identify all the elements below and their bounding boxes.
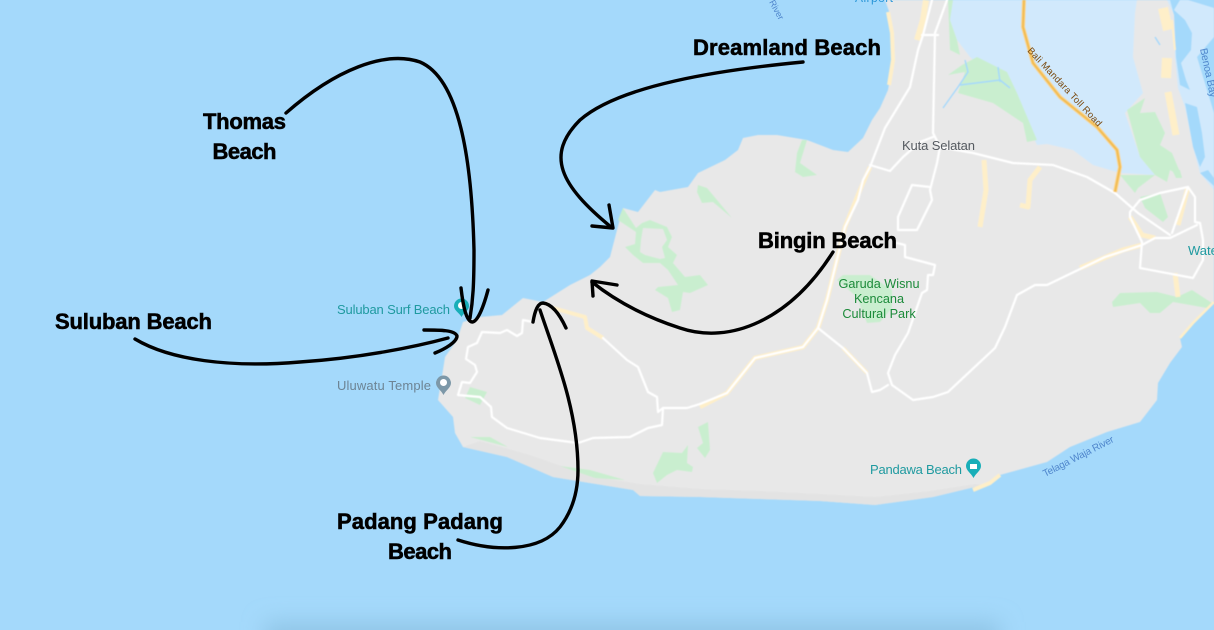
yellow arterial patches	[553, 0, 1214, 490]
bay water east	[1167, 0, 1214, 190]
icon: Suluban Surf Beach pin	[454, 299, 469, 317]
arrow: Bingin Beach	[592, 252, 833, 333]
arrow: Padang Padang Beach	[458, 303, 578, 548]
streams	[943, 37, 1160, 108]
icon: Pandawa Beach pin	[966, 458, 981, 478]
place name labels	[337, 0, 1214, 480]
green areas	[465, 0, 1212, 483]
place name labels: Cultural Park	[842, 307, 916, 321]
label: Padang Padang Beach: Beach	[388, 539, 452, 564]
arrow: Dreamland Beach	[561, 62, 803, 228]
label: Dreamland Beach: Dreamland Beach	[693, 35, 881, 60]
label: Thomas Beach: Beach	[212, 139, 276, 164]
arrow: Suluban Beach	[135, 330, 457, 364]
label: Padang Padang Beach: Padang Padang	[337, 509, 503, 534]
base map	[438, 0, 1214, 505]
place name labels: Suluban Surf Beach	[337, 302, 450, 317]
place name labels: Telaga Waja River	[1041, 434, 1116, 480]
south coast shading	[463, 441, 983, 505]
place name labels: Kuta Selatan	[902, 138, 975, 153]
land: peninsula	[438, 0, 1214, 505]
toll road	[1023, 0, 1120, 192]
arrow: Thomas Beach	[286, 59, 488, 322]
place name labels: Pandawa Beach	[870, 462, 962, 477]
road network	[458, 0, 1203, 443]
label: Bingin Beach: Bingin Beach	[758, 228, 897, 253]
place name labels: Garuda Wisnu	[838, 277, 920, 291]
label: Suluban Beach: Suluban Beach	[55, 309, 212, 334]
place name labels: Bali Mandara Toll Road	[1025, 46, 1104, 129]
label: Thomas Beach: Thomas	[203, 109, 286, 134]
lagoon: light water	[950, 0, 1155, 175]
place name labels: Kencana	[854, 292, 905, 306]
place name labels: Uluwatu Temple	[337, 378, 431, 393]
label: Thomas Beach	[203, 109, 286, 164]
icon: Uluwatu Temple pin	[436, 376, 451, 395]
bottom shadow	[265, 622, 1000, 630]
label: Padang Padang Beach	[337, 509, 503, 564]
